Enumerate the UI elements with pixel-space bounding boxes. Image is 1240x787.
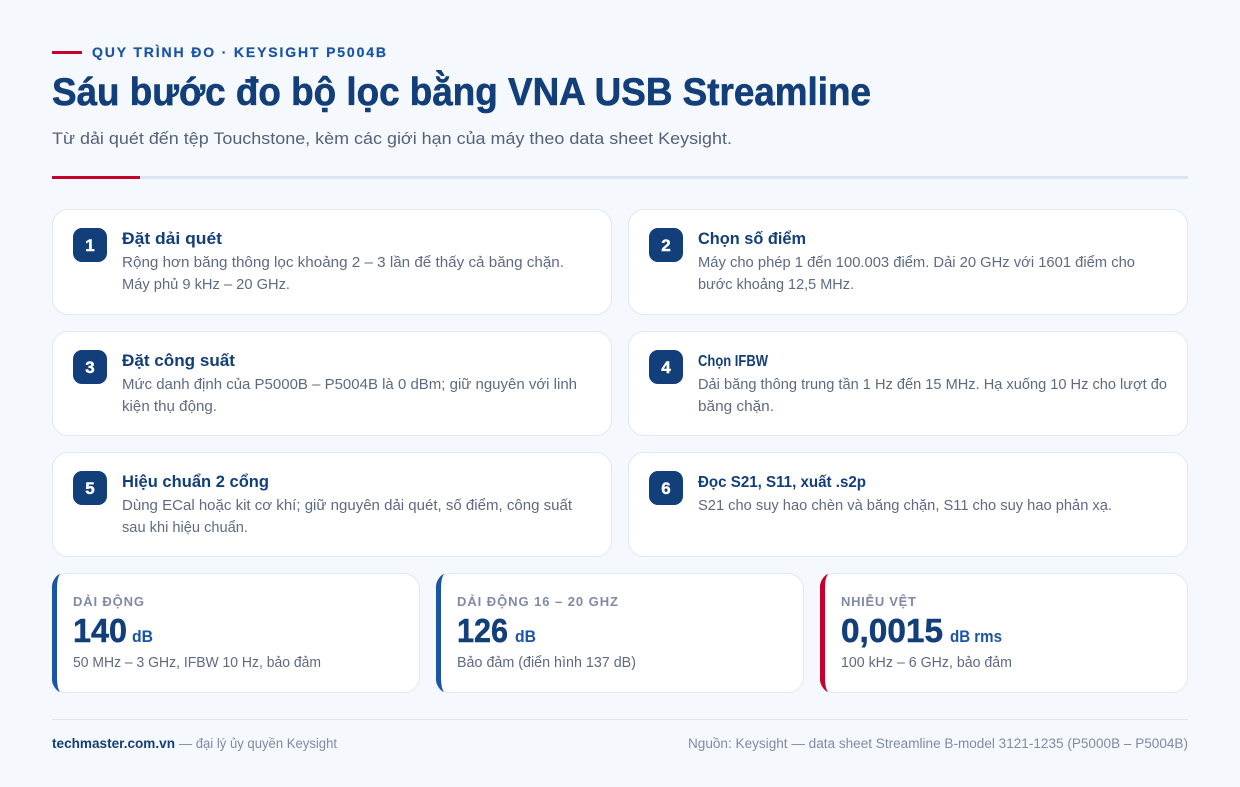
subtitle: Từ dải quét đến tệp Touchstone, kèm các giới hạn của máy theo data sheet Keysight. [52, 129, 732, 148]
icon: step number 3: 3 [85, 358, 95, 377]
footer: distributor: — đại lý ủy quyền Keysight [179, 736, 337, 751]
step 6 heading: Đọc S21, S11, xuất .s2p [698, 474, 866, 491]
step 6 text: S21 cho suy hao chèn và băng chặn, S11 cho suy hao phản xạ. [698, 498, 1112, 514]
step 5 text: sau khi hiệu chuẩn. [122, 520, 248, 536]
panel: step 5 [52, 452, 612, 556]
stat value [73, 612, 153, 649]
stat value [841, 612, 1002, 649]
panel: step 6 [628, 452, 1188, 556]
stat value: dB rms [950, 628, 1002, 646]
footer: source: Nguồn: Keysight — data sheet Streamline B-model 3121-1235 (P5000B – P5004B) [688, 736, 1188, 751]
step 5 heading: Hiệu chuẩn 2 cổng [122, 473, 269, 491]
icon: step number 5 [73, 471, 107, 505]
step 3 heading: Đặt công suất [122, 352, 236, 370]
stat note: 100 kHz – 6 GHz, bảo đảm [841, 655, 1012, 671]
step 1 text [122, 255, 564, 293]
stat label: NHIỄU VỆT [841, 594, 916, 609]
title: Sáu bước đo bộ lọc bằng VNA USB Streamline [52, 70, 871, 114]
panel: stat dynamic range 16-20 GHz [436, 574, 804, 692]
step 2 text: Máy cho phép 1 đến 100.003 điểm. Dải 20 GHz với 1601 điểm cho [698, 255, 1135, 271]
step 1 heading: Đặt dải quét [122, 230, 223, 248]
stat note: 50 MHz – 3 GHz, IFBW 10 Hz, bảo đảm [73, 655, 321, 671]
step 5 text [122, 498, 572, 536]
step 2 heading: Chọn số điểm [698, 230, 806, 248]
icon: step number 2: 2 [661, 236, 671, 255]
header [52, 44, 871, 148]
icon: step number 1: 1 [85, 236, 95, 255]
stat label: DẢI ĐỘNG 16 – 20 GHZ [457, 594, 618, 609]
icon: step number 6: 6 [661, 479, 671, 498]
stat value: 126 [457, 612, 508, 649]
panel: step 3 [52, 332, 612, 436]
panel: stat trace noise [820, 574, 1188, 692]
step 1 text: Máy phủ 9 kHz – 20 GHz. [122, 277, 290, 293]
icon: step number 5: 5 [85, 479, 95, 498]
step 3 text: kiện thụ động. [122, 399, 217, 415]
stat label: DẢI ĐỘNG [73, 594, 144, 609]
panel: stat dynamic range [52, 574, 419, 692]
step 4 text: Dải băng thông trung tần 1 Hz đến 15 MHz. Hạ xuống 10 Hz cho lượt đo [698, 377, 1167, 393]
step 4 text: băng chặn. [698, 399, 774, 415]
icon: step number 2 [649, 228, 683, 262]
step 3 text [122, 377, 577, 415]
step 2 text [698, 255, 1135, 293]
step 5 text: Dùng ECal hoặc kit cơ khí; giữ nguyên dải quét, số điểm, công suất [122, 498, 572, 514]
step 4 text [698, 377, 1167, 415]
icon: step number 6 [649, 471, 683, 505]
icon: step number 4: 4 [661, 358, 671, 377]
stat value: dB [132, 628, 153, 646]
step 4 heading: Chọn IFBW [698, 353, 768, 370]
panel: step 2 [628, 210, 1188, 314]
stat value: 140 [73, 612, 127, 649]
panel: step 1 [52, 210, 612, 314]
icon: step number 3 [73, 350, 107, 384]
step 2 text: bước khoảng 12,5 MHz. [698, 277, 854, 293]
panel: step 4 [628, 332, 1188, 436]
step 3 text: Mức danh định của P5000B – P5004B là 0 dBm; giữ nguyên với linh [122, 377, 577, 393]
stat value: 0,0015 [841, 612, 943, 649]
stat value: dB [515, 628, 536, 646]
stat value [457, 612, 536, 649]
icon: step number 1 [73, 228, 107, 262]
eyebrow: QUY TRÌNH ĐO · KEYSIGHT P5004B [92, 44, 386, 60]
eyebrow accent line [52, 51, 82, 54]
step 1 text: Rộng hơn băng thông lọc khoảng 2 – 3 lần để thấy cả băng chặn. [122, 255, 564, 271]
icon: step number 4 [649, 350, 683, 384]
stat note: Bảo đảm (điển hình 137 dB) [457, 655, 636, 671]
footer: distributor: techmaster.com.vn [52, 736, 175, 751]
footer: distributor [52, 736, 337, 751]
